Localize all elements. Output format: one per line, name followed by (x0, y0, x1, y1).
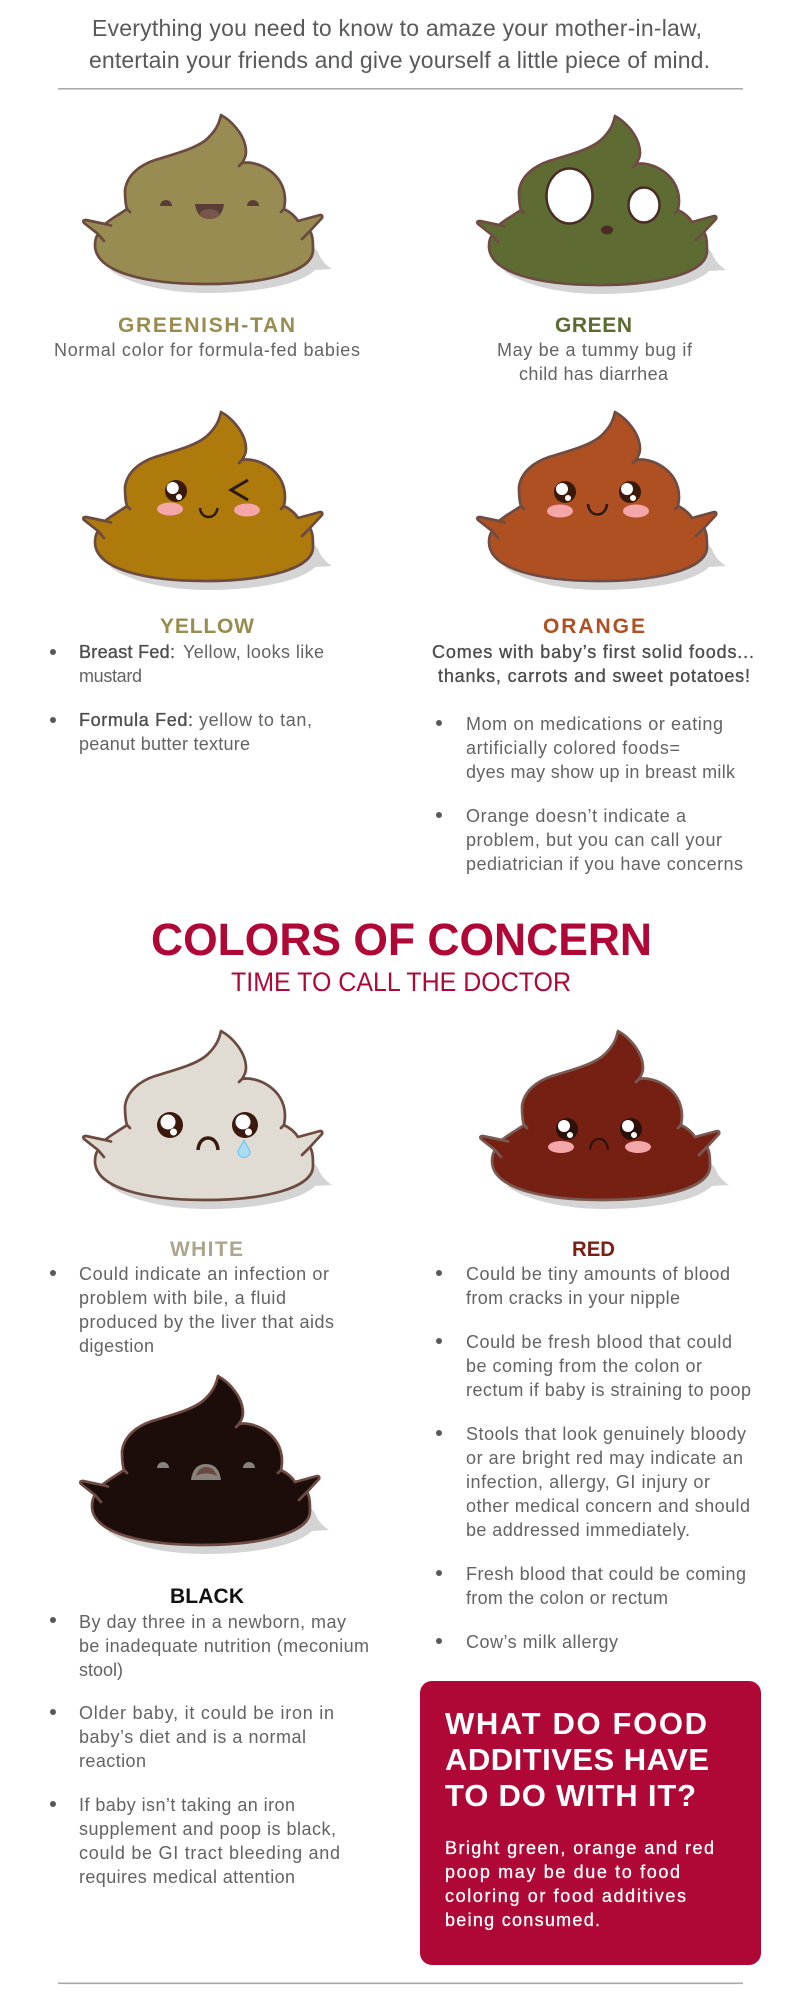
list: black notes: stool) (79, 1660, 123, 1680)
list: red notes: be coming from the colon or (466, 1356, 702, 1376)
list: black notes (50, 1612, 369, 1887)
list: black notes: supplement and poop is black, (79, 1819, 336, 1839)
list: black notes: If baby isn’t taking an iron (79, 1795, 295, 1815)
list: red notes: be addressed immediately. (466, 1520, 690, 1540)
list: red notes: other medical concern and should (466, 1496, 750, 1516)
callout: food additives (420, 1681, 761, 1965)
list: yellow notes: yellow to tan, (199, 710, 312, 730)
list: red notes: Cow’s milk allergy (466, 1632, 618, 1652)
icon: black poop (80, 1376, 329, 1554)
list: orange notes: Mom on medications or eating (466, 714, 723, 734)
text: green note (497, 340, 693, 384)
list: red notes: Stools that look genuinely bloody (466, 1424, 746, 1444)
list: black notes: be inadequate nutrition (meconium (79, 1636, 369, 1656)
callout text: poop may be due to food (445, 1862, 680, 1882)
list: red notes: infection, allergy, GI injury or (466, 1472, 710, 1492)
heading: red: RED (572, 1238, 615, 1261)
list: orange notes: problem, but you can call your (466, 830, 722, 850)
list: red notes: from the colon or rectum (466, 1588, 668, 1608)
list: red notes: Fresh blood that could be coming (466, 1564, 746, 1584)
text: orange lead (432, 642, 754, 686)
list: orange notes: artificially colored foods= (466, 738, 680, 758)
callout heading: TO DO WITH IT? (445, 1778, 696, 1813)
callout text: coloring or food additives (445, 1886, 686, 1906)
heading: yellow: YELLOW (160, 615, 254, 638)
text: orange lead: thanks, carrots and sweet potatoes! (438, 666, 750, 686)
list: white notes: problem with bile, a fluid (79, 1288, 286, 1308)
list: yellow notes: Yellow, looks like (183, 642, 324, 662)
icon: greenish-tan poop (83, 115, 332, 293)
list: black notes: reaction (79, 1751, 146, 1771)
heading: white: WHITE (170, 1238, 243, 1261)
callout heading (445, 1706, 709, 1813)
intro heading: Everything you need to know to amaze your mother-in-law, (92, 15, 702, 41)
list: yellow notes: peanut butter texture (79, 734, 250, 754)
list: orange notes (436, 714, 743, 874)
panel: yellow (50, 412, 332, 754)
list: orange notes: dyes may show up in breast milk (466, 762, 736, 782)
panel: green (477, 116, 726, 384)
list: black notes: baby’s diet and is a normal (79, 1727, 306, 1747)
list: black notes: Older baby, it could be iron in (79, 1703, 334, 1723)
list: yellow notes (50, 642, 324, 754)
list: yellow notes: Breast Fed: (79, 642, 175, 662)
list: black notes: could be GI tract bleeding and (79, 1843, 340, 1863)
icon: green poop (477, 116, 726, 294)
icon: yellow poop (83, 412, 332, 590)
heading: greenish-tan: GREENISH-TAN (118, 314, 295, 337)
list: orange notes: pediatrician if you have concerns (466, 854, 743, 874)
panel: orange (432, 412, 754, 874)
list: black notes: requires medical attention (79, 1867, 295, 1887)
callout heading: ADDITIVES HAVE (445, 1742, 709, 1777)
list: white notes: produced by the liver that aids (79, 1312, 334, 1332)
callout heading: WHAT DO FOOD (445, 1706, 707, 1741)
list: white notes (50, 1264, 334, 1356)
list: yellow notes: Formula Fed: (79, 710, 193, 730)
text: greenish-tan note: Normal color for formula-fed babies (54, 340, 360, 360)
list: white notes: Could indicate an infection or (79, 1264, 329, 1284)
heading: orange: ORANGE (543, 615, 645, 638)
panel: red (436, 1031, 751, 1652)
icon: red poop (480, 1031, 729, 1209)
heading: green: GREEN (555, 314, 632, 337)
heading: colors of concern: TIME TO CALL THE DOCTOR (231, 967, 571, 997)
list: white notes: digestion (79, 1336, 154, 1356)
heading: black: BLACK (170, 1585, 244, 1608)
callout text (445, 1838, 714, 1930)
heading: colors of concern (151, 914, 652, 997)
icon: white poop (83, 1031, 332, 1209)
icon: orange poop (477, 412, 726, 590)
list: red notes: Could be fresh blood that could (466, 1332, 732, 1352)
list: yellow notes: mustard (79, 666, 142, 686)
list: orange notes: Orange doesn’t indicate a (466, 806, 687, 826)
panel: white (50, 1031, 334, 1356)
text: orange lead: Comes with baby’s first solid foods... (432, 642, 754, 662)
panel: greenish-tan (54, 115, 360, 360)
list: red notes (436, 1264, 751, 1652)
list: red notes: or are bright red may indicate an (466, 1448, 743, 1468)
list: red notes: Could be tiny amounts of blood (466, 1264, 730, 1284)
list: red notes: rectum if baby is straining to poop (466, 1380, 751, 1400)
text: green note: child has diarrhea (519, 364, 669, 384)
list: red notes: from cracks in your nipple (466, 1288, 680, 1308)
callout text: Bright green, orange and red (445, 1838, 714, 1858)
callout text: being consumed. (445, 1910, 600, 1930)
list: black notes: By day three in a newborn, may (79, 1612, 346, 1632)
text: green note: May be a tummy bug if (497, 340, 693, 360)
panel: black (50, 1376, 369, 1887)
intro heading: entertain your friends and give yourself a little piece of mind. (89, 47, 710, 73)
heading: colors of concern: COLORS OF CONCERN (151, 914, 652, 965)
intro heading (89, 15, 710, 73)
